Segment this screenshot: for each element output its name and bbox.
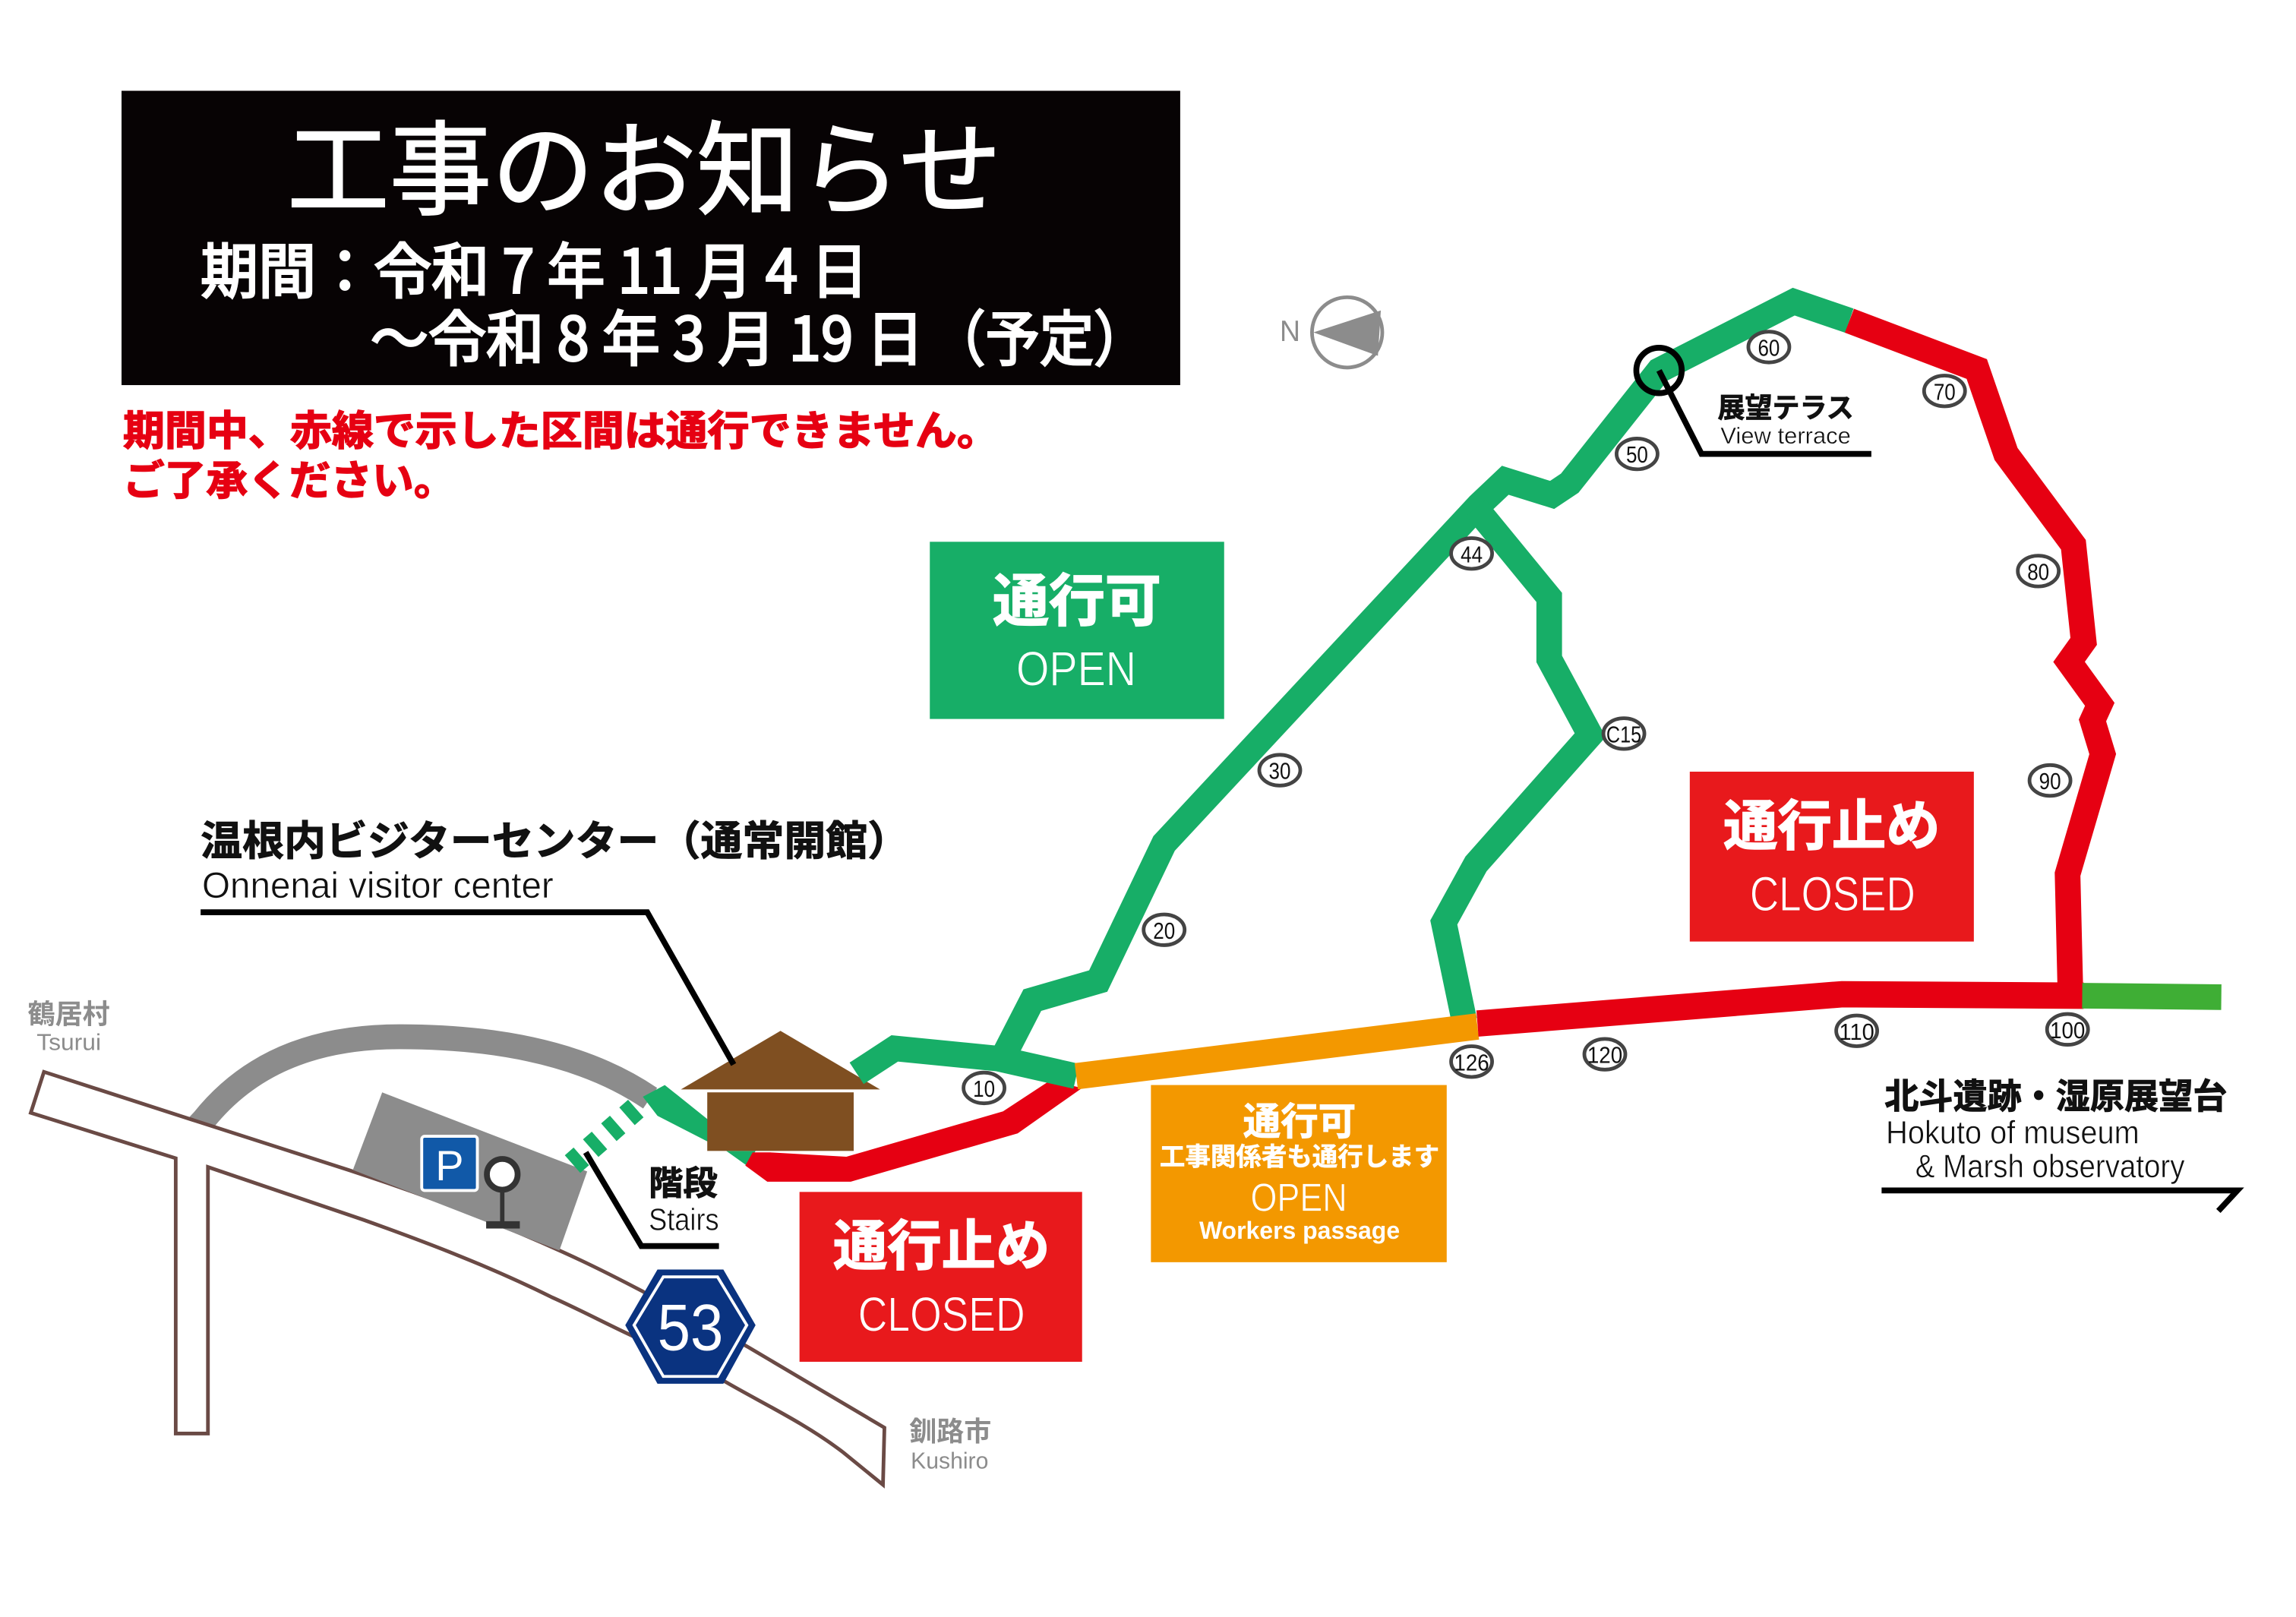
distance markers: 44 xyxy=(1461,541,1483,567)
label: view terrace: View terrace xyxy=(1720,422,1851,449)
distance markers: 80 xyxy=(2027,558,2049,585)
label: visitor center: 温根内ビジターセンター（通常開館） xyxy=(201,807,909,867)
title: 工事のお知らせ xyxy=(287,87,1002,236)
panel: closed legend north: 通行止め xyxy=(1723,782,1941,861)
distance markers: 60 xyxy=(1758,334,1780,361)
label: stairs xyxy=(586,1152,719,1246)
panel: workers passage legend: 工事関係者も通行します xyxy=(1160,1136,1439,1173)
label: Kushiro xyxy=(909,1410,991,1474)
panel: workers passage legend: Workers passage xyxy=(1199,1216,1400,1244)
distance markers: 110 xyxy=(1839,1019,1874,1045)
period line 2: ～令和 8 年 3 月 19 日 xyxy=(371,290,924,377)
label: stairs: Stairs xyxy=(649,1202,719,1236)
panel: closed legend north: CLOSED xyxy=(1750,867,1915,921)
panel: closed legend north xyxy=(1690,772,1974,942)
label: Kushiro: Kushiro xyxy=(911,1448,988,1474)
compass north arrow: N xyxy=(1280,315,1300,348)
panel: open legend: OPEN xyxy=(1016,642,1136,696)
label: stairs: 階段 xyxy=(649,1156,718,1205)
road: grey access road xyxy=(183,1037,650,1142)
icon: route 53 shield xyxy=(625,1270,756,1384)
label: visitor center: Onnenai visitor center xyxy=(202,865,554,906)
compass north arrow xyxy=(1280,297,1382,368)
distance markers: 120 xyxy=(1587,1042,1622,1069)
label: view terrace: 展望テラス xyxy=(1717,385,1854,425)
path: green near visitor center xyxy=(643,1085,709,1142)
distance markers: C15 xyxy=(1606,721,1641,747)
label: Hokuto museum and marsh observatory: Hokuto of museum xyxy=(1886,1115,2140,1151)
label: Hokuto museum and marsh observatory: & Marsh observatory xyxy=(1915,1148,2185,1184)
title banner xyxy=(122,87,1180,385)
panel: open legend: 通行可 xyxy=(993,554,1161,637)
distance markers: 20 xyxy=(1153,917,1175,944)
panel: open legend xyxy=(930,542,1224,719)
icon: visitor center building xyxy=(681,1031,880,1151)
distance markers: 126 xyxy=(1454,1049,1489,1075)
path: red closed loop xyxy=(1849,321,2103,996)
label: view terrace xyxy=(1636,348,1871,454)
distance markers: 100 xyxy=(2050,1017,2085,1044)
path: red closed south section xyxy=(745,1081,1082,1182)
path: green open branch xyxy=(1444,508,1590,1021)
panel: closed legend south: CLOSED xyxy=(858,1287,1025,1341)
label: Kushiro: 釧路市 xyxy=(909,1410,991,1449)
notice text xyxy=(123,397,999,507)
path: red closed road xyxy=(1477,994,2083,1024)
panel: workers passage legend xyxy=(1151,1085,1447,1262)
label: Tsurui xyxy=(28,993,110,1055)
period note: （予定） xyxy=(931,290,1148,377)
label: Tsurui: Tsurui xyxy=(36,1028,101,1055)
icon: parking sign: P xyxy=(435,1142,464,1189)
panel: workers passage legend: OPEN xyxy=(1250,1176,1347,1220)
path: green open main trail xyxy=(857,302,1849,1076)
distance markers: 70 xyxy=(1934,378,1956,405)
parking lot xyxy=(353,1092,587,1250)
path: green stub under visitor center xyxy=(726,1151,756,1166)
panel: workers passage legend: 通行可 xyxy=(1243,1091,1356,1146)
stairs dashed path xyxy=(573,1101,644,1164)
distance markers: 10 xyxy=(973,1075,995,1102)
road: highway 53 outline xyxy=(30,1072,884,1485)
distance markers: 50 xyxy=(1626,441,1648,468)
panel: closed legend south: 通行止め xyxy=(833,1202,1050,1281)
label: Tsurui: 鶴居村 xyxy=(28,993,110,1032)
icon: route 53 shield: 53 xyxy=(658,1291,723,1365)
icon: map pin xyxy=(486,1159,520,1229)
path: green road east xyxy=(2083,996,2222,997)
distance markers: 90 xyxy=(2039,768,2061,794)
notice text: 期間中、赤線で示した区間は通行できません。 xyxy=(123,397,999,457)
icon: parking sign xyxy=(422,1136,478,1190)
label: Hokuto museum and marsh observatory xyxy=(1881,1068,2238,1211)
distance markers: 30 xyxy=(1269,758,1290,785)
path: orange workers passage xyxy=(1076,1026,1477,1076)
period line 1: 期間：令和 7 年 11 月 4 日 xyxy=(201,223,868,311)
label: Hokuto museum and marsh observatory: 北斗遺跡・湿原展望台 xyxy=(1884,1068,2227,1119)
distance markers xyxy=(964,332,2088,1104)
panel: closed legend south xyxy=(800,1192,1082,1362)
notice text: ご了承ください。 xyxy=(123,447,456,507)
label: visitor center xyxy=(201,807,909,1065)
